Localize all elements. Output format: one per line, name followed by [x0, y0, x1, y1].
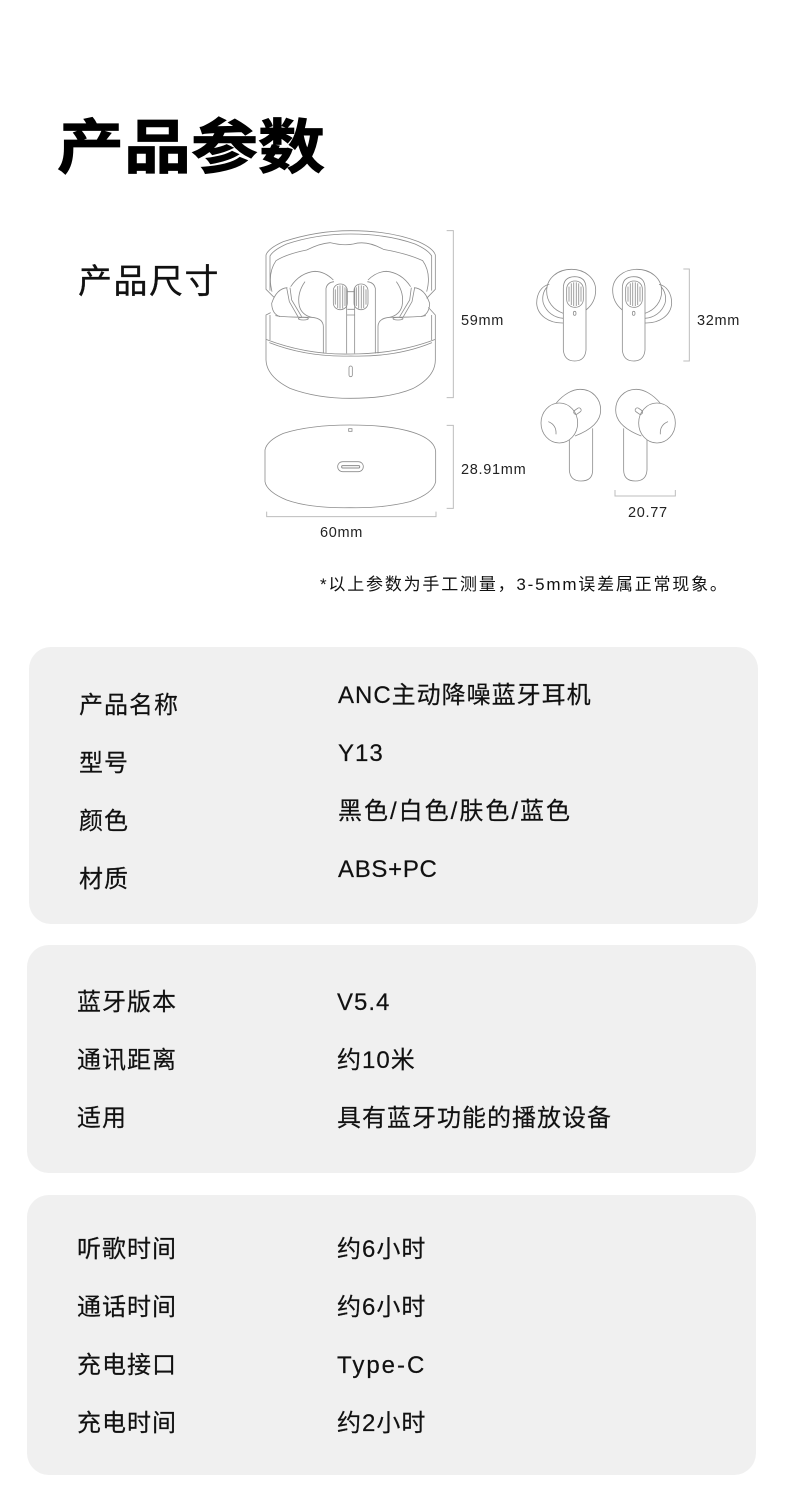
value: product name: ANC主动降噪蓝牙耳机 — [338, 682, 592, 709]
label: width 60mm: 60mm — [320, 525, 363, 541]
label: width 20.77: 20.77 — [628, 505, 668, 521]
value: music time: 约6小时 — [337, 1236, 426, 1263]
panel: connectivity — [27, 945, 756, 1173]
label: range: 通讯距离 — [77, 1047, 177, 1074]
label: height 32mm: 32mm — [697, 313, 740, 329]
heading: product dimensions: 产品尺寸 — [78, 263, 220, 301]
label: music time: 听歌时间 — [77, 1236, 177, 1263]
label: depth 28.91mm: 28.91mm — [461, 462, 526, 478]
value: charging port: Type-C — [337, 1352, 426, 1379]
note: measurement disclaimer: *以上参数为手工测量，3-5mm误差属正常现象。 — [320, 575, 729, 594]
label: model: 型号 — [79, 750, 129, 777]
label: height 59mm: 59mm — [461, 313, 504, 329]
label: colour: 颜色 — [79, 808, 129, 835]
title: 产品参数 — [57, 115, 325, 181]
value: compatibility: 具有蓝牙功能的播放设备 — [337, 1105, 612, 1132]
value: charging time: 约2小时 — [337, 1410, 426, 1437]
label: compatibility: 适用 — [77, 1105, 127, 1132]
label: Bluetooth version: 蓝牙版本 — [77, 989, 177, 1016]
label: material: 材质 — [79, 866, 129, 893]
value: model: Y13 — [338, 740, 384, 767]
label: charging time: 充电时间 — [77, 1410, 177, 1437]
label: charging port: 充电接口 — [77, 1352, 177, 1379]
panel: product info — [29, 647, 758, 924]
panel: battery — [27, 1195, 756, 1475]
value: Bluetooth version: V5.4 — [337, 989, 390, 1016]
label: call time: 通话时间 — [77, 1294, 177, 1321]
value: colour: 黑色/白色/肤色/蓝色 — [338, 798, 572, 825]
value: range: 约10米 — [337, 1047, 416, 1074]
label: product name: 产品名称 — [79, 692, 179, 719]
value: material: ABS+PC — [338, 856, 438, 883]
value: call time: 约6小时 — [337, 1294, 426, 1321]
